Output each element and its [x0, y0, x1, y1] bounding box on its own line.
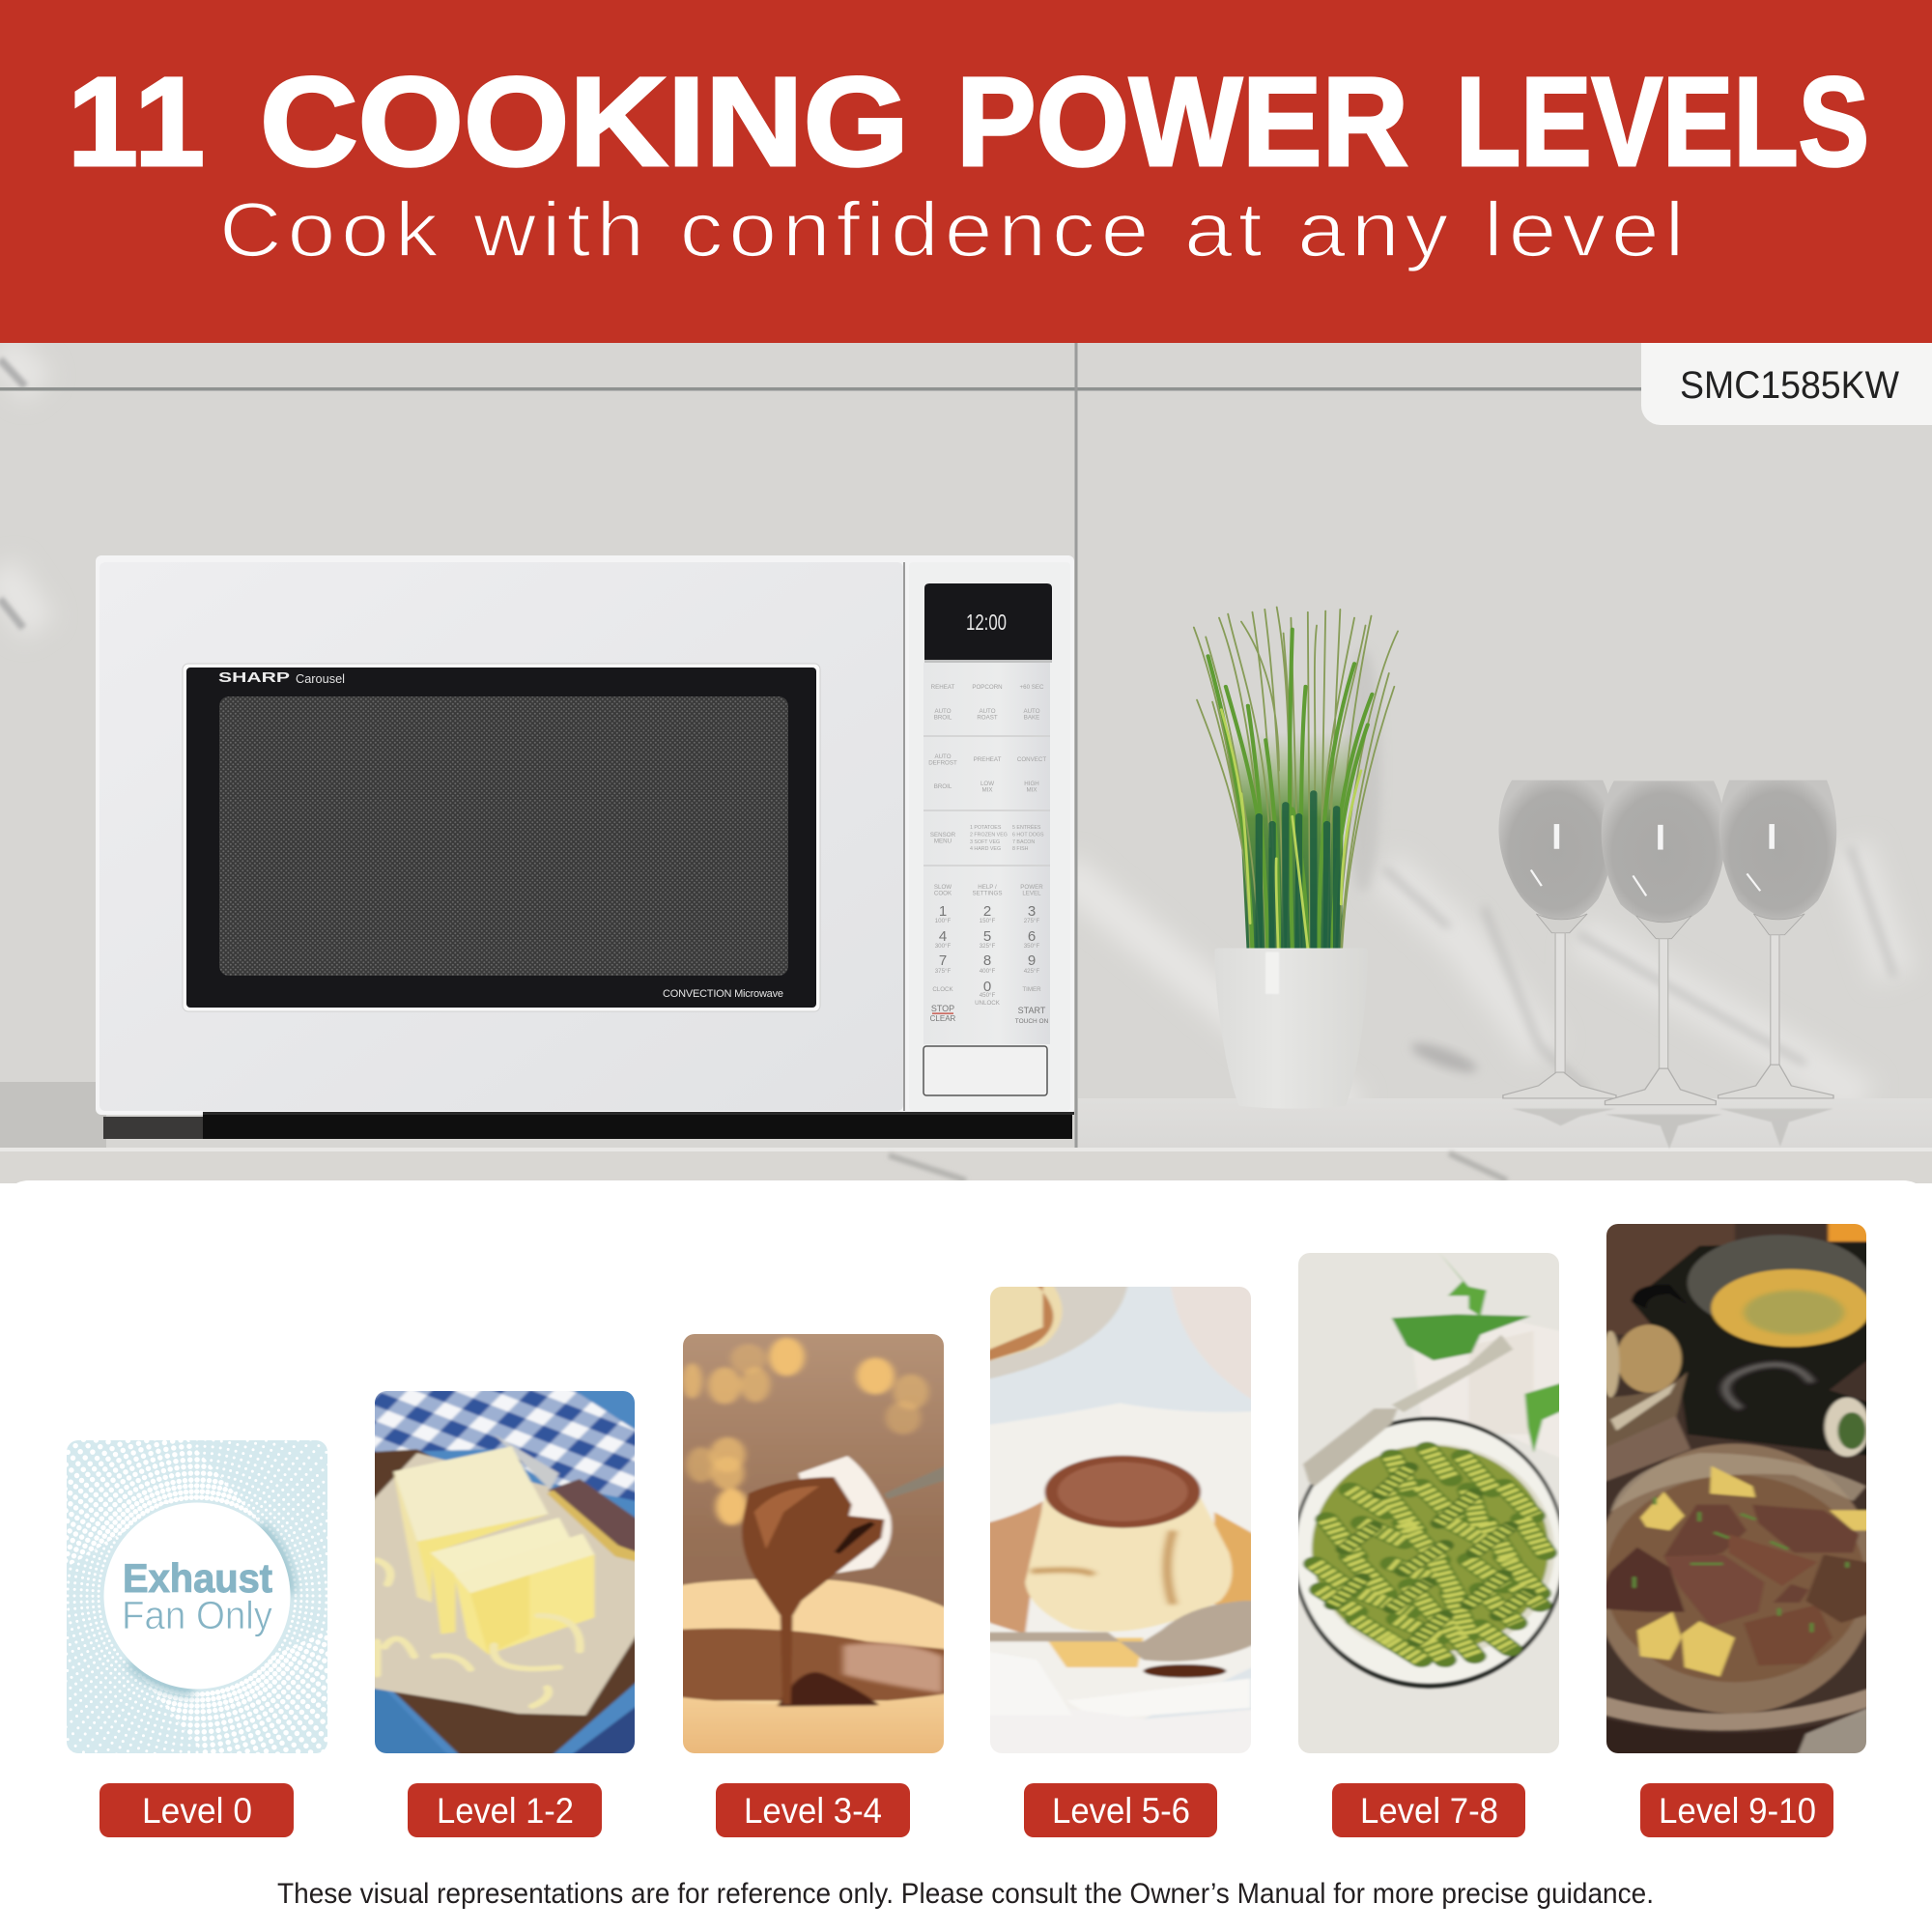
control keypad: SETTINGS — [973, 891, 1002, 896]
display: 12:00 — [966, 610, 1007, 635]
control keypad: STOP — [931, 1004, 954, 1013]
control keypad: 1 — [939, 903, 947, 920]
control keypad: 9 — [1028, 952, 1036, 969]
door release button — [923, 1046, 1047, 1095]
control keypad: 4 — [939, 928, 947, 945]
pill: Level 5-6: Level 5-6 — [1052, 1791, 1190, 1831]
control keypad: 7 BACON — [1012, 839, 1035, 845]
microwave window: CONVECTION Microwave — [663, 988, 783, 1000]
control keypad: COOK — [934, 891, 952, 896]
control keypad: AUTO — [934, 708, 952, 715]
control keypad: 325°F — [980, 943, 996, 950]
glass left — [1498, 781, 1616, 1125]
pill: Level 9-10: Level 9-10 — [1659, 1791, 1816, 1831]
control keypad: REHEAT — [931, 684, 955, 691]
pill: Level 9-10 — [1640, 1783, 1833, 1837]
control keypad: 400°F — [980, 968, 996, 975]
pill: Level 0: Level 0 — [142, 1791, 252, 1831]
pill: Level 3-4: Level 3-4 — [744, 1791, 882, 1831]
control keypad: 300°F — [935, 943, 952, 950]
control keypad: SENSOR — [930, 832, 956, 838]
control keypad: 7 — [939, 952, 947, 969]
control keypad: 5 ENTRÉES — [1012, 824, 1041, 831]
pill: Level 0 — [99, 1783, 294, 1837]
control keypad: 6 HOT DOGS — [1012, 833, 1044, 838]
card: flan — [990, 1287, 1251, 1753]
pill: Level 1-2 — [408, 1783, 602, 1837]
glass center — [1602, 781, 1725, 1149]
control keypad: CLOCK — [932, 986, 954, 993]
control keypad: MENU — [934, 838, 952, 844]
control keypad: HIGH — [1024, 781, 1039, 787]
exhaust badge circle: Fan Only — [122, 1593, 272, 1637]
microwave window: SHARP — [218, 669, 290, 686]
title — [68, 50, 1869, 192]
exhaust badge circle: Exhaust — [123, 1555, 272, 1601]
control keypad: AUTO — [979, 708, 996, 715]
control keypad: CONVECT — [1017, 756, 1046, 763]
control keypad: BROIL — [934, 715, 952, 721]
microwave — [96, 555, 1074, 1139]
control keypad: POWER — [1020, 884, 1043, 891]
control keypad: LEVEL — [1022, 891, 1041, 896]
control keypad: 350°F — [1024, 943, 1040, 950]
card: beef stew — [1606, 1224, 1866, 1753]
subtitle: Cook with confidence at any level — [219, 185, 1684, 272]
control keypad: BROIL — [934, 783, 952, 790]
control keypad: 275°F — [1024, 918, 1040, 924]
control keypad: PREHEAT — [974, 756, 1002, 763]
card: exhaust fan only — [67, 1440, 327, 1753]
pill: Level 5-6 — [1024, 1783, 1217, 1837]
control keypad: 100°F — [935, 918, 952, 924]
title: COOKING — [260, 50, 909, 192]
control keypad: 450°F — [980, 992, 996, 999]
microwave window: Carousel — [296, 671, 345, 686]
title: 11 — [68, 50, 205, 192]
control keypad: LOW — [980, 781, 994, 787]
model number tag: SMC1585KW — [1680, 364, 1899, 407]
glass right — [1719, 781, 1836, 1147]
model number tag — [1641, 343, 1932, 425]
display — [924, 583, 1052, 663]
control keypad: MIX — [981, 786, 993, 794]
pill: Level 1-2: Level 1-2 — [437, 1791, 574, 1831]
control keypad: TIMER — [1022, 986, 1041, 993]
flower pot — [1214, 949, 1368, 1109]
title: POWER — [956, 50, 1408, 192]
control keypad: START — [1018, 1006, 1046, 1015]
control keypad: 375°F — [935, 968, 952, 975]
control keypad: 8 FISH — [1012, 846, 1029, 852]
control keypad: DEFROST — [928, 759, 957, 767]
control keypad: TOUCH ON — [1015, 1018, 1049, 1025]
bottom white panel — [0, 1180, 1932, 1932]
control keypad: +60 SEC — [1020, 684, 1044, 691]
footer disclaimer: These visual representations are for reference only. Please consult the Owner’s Manual for more precise guidance. — [277, 1878, 1654, 1910]
control keypad: AUTO — [1023, 708, 1040, 715]
control keypad: 2 — [983, 903, 991, 920]
control keypad: 150°F — [980, 918, 996, 924]
microwave window — [183, 664, 820, 1011]
exhaust badge circle — [104, 1503, 290, 1689]
pill: Level 7-8 — [1332, 1783, 1525, 1837]
control keypad: HELP / — [978, 884, 997, 891]
control keypad: 4 HARD VEG — [970, 846, 1001, 852]
card: chocolate marshmallow — [683, 1334, 944, 1753]
level pills — [99, 1783, 1833, 1837]
control keypad: POPCORN — [972, 684, 1003, 691]
control keypad: 0 — [983, 979, 991, 995]
control keypad: BAKE — [1024, 715, 1039, 721]
control keypad: UNLOCK — [975, 1000, 1001, 1007]
header banner — [0, 0, 1932, 343]
control keypad: MIX — [1026, 786, 1037, 794]
control keypad: 5 — [983, 928, 991, 945]
control keypad: SLOW — [934, 884, 952, 891]
kitchen background scene — [0, 343, 1932, 1183]
control keypad: 3 — [1028, 903, 1036, 920]
control keypad — [923, 663, 1050, 1044]
control keypad: AUTO — [934, 753, 952, 760]
pill: Level 3-4 — [716, 1783, 910, 1837]
control keypad: 1 POTATOES — [970, 825, 1002, 831]
card: pesto pasta — [1298, 1253, 1559, 1753]
pill: Level 7-8: Level 7-8 — [1360, 1791, 1498, 1831]
control keypad: 3 SOFT VEG — [970, 839, 1000, 845]
control keypad: ROAST — [977, 715, 998, 721]
potted plant — [1194, 607, 1398, 1109]
control keypad: 425°F — [1024, 968, 1040, 975]
control keypad: CLEAR — [930, 1014, 956, 1023]
card: butter — [375, 1391, 635, 1753]
control keypad: 2 FROZEN VEG — [970, 833, 1008, 838]
control keypad: 8 — [983, 952, 991, 969]
wine glasses — [1498, 781, 1836, 1149]
control keypad: 6 — [1028, 928, 1036, 945]
